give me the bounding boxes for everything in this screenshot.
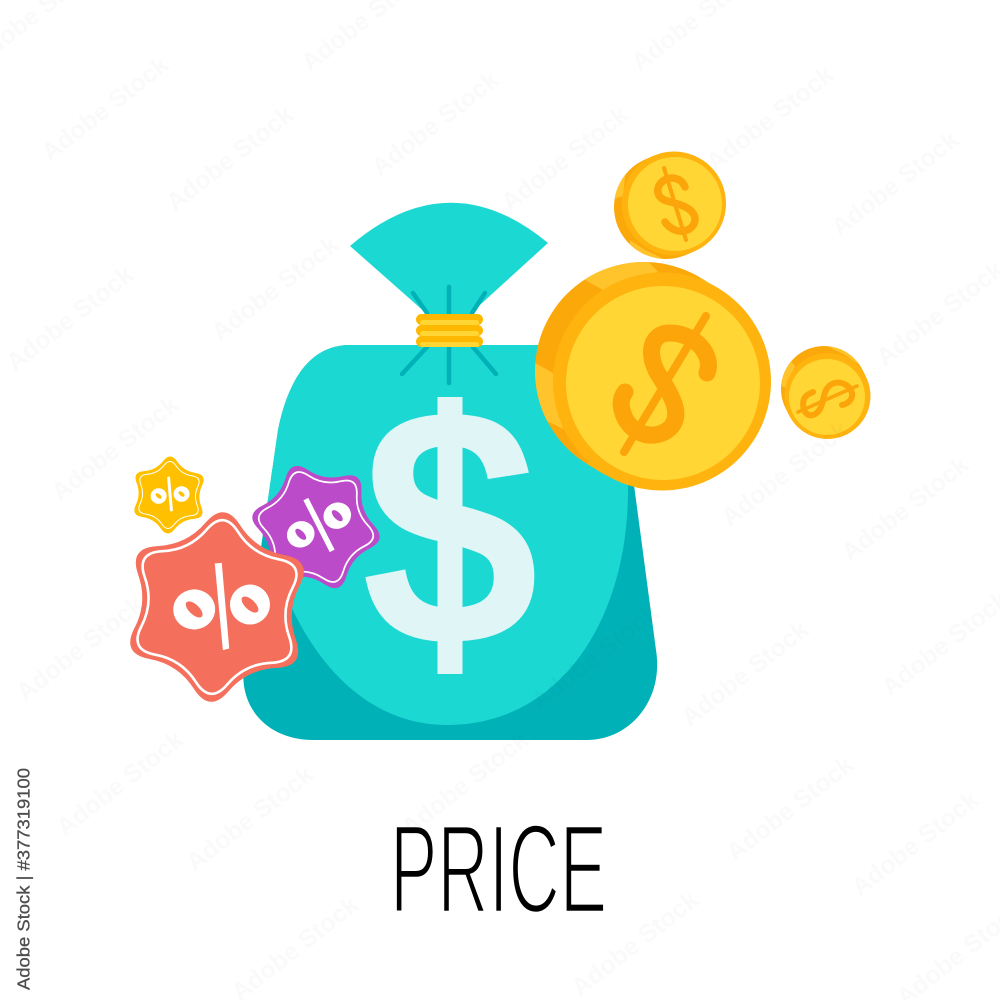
small yellow percent badge <box>134 455 204 535</box>
small right gold coin <box>779 340 870 439</box>
bag folds <box>402 287 496 383</box>
large gold coin <box>525 255 771 490</box>
watermark pattern: Adobe Stock <box>46 391 184 507</box>
watermark pattern: Adobe Stock <box>206 231 344 347</box>
watermark pattern: Adobe Stock <box>1 261 139 377</box>
watermark pattern: Adobe Stock <box>161 101 299 217</box>
watermark pattern: Adobe Stock <box>36 51 174 167</box>
watermark pattern: Adobe Stock <box>846 786 984 902</box>
watermark pattern: Adobe Stock <box>721 751 859 867</box>
stock id side text: Adobe Stock | #377319100 <box>14 768 34 990</box>
purple percent badge <box>240 447 392 607</box>
watermark pattern: Adobe Stock <box>716 416 854 532</box>
watermark pattern: Adobe Stock <box>826 126 964 242</box>
watermark pattern: Adobe Stock <box>11 591 149 707</box>
bag top fan <box>350 203 548 314</box>
watermark pattern: Adobe Stock <box>496 101 634 217</box>
watermark pattern: Adobe Stock <box>396 726 534 842</box>
watermark pattern: Adobe Stock <box>51 726 189 842</box>
red percent badge <box>126 506 308 708</box>
title: PRICE <box>390 800 607 940</box>
dollar sign <box>621 316 708 452</box>
bag dollar sign: $ <box>361 337 539 717</box>
watermark pattern: Adobe Stock <box>566 886 704 1000</box>
watermark pattern: Adobe Stock <box>701 61 839 177</box>
money bag <box>230 203 657 740</box>
watermark pattern: Adobe Stock <box>526 599 664 715</box>
dollar sign <box>798 383 857 415</box>
watermark pattern: Adobe Stock <box>181 761 319 877</box>
watermark pattern: Adobe Stock <box>676 616 814 732</box>
watermark pattern: Adobe Stock <box>366 66 504 182</box>
bag dollar sign <box>365 397 534 674</box>
watermark pattern: Adobe Stock <box>836 451 974 567</box>
rope tie <box>416 314 483 347</box>
small top gold coin <box>610 150 726 262</box>
dollar sign <box>658 168 695 240</box>
bag body <box>230 340 657 740</box>
infographic canvas <box>16 152 870 990</box>
